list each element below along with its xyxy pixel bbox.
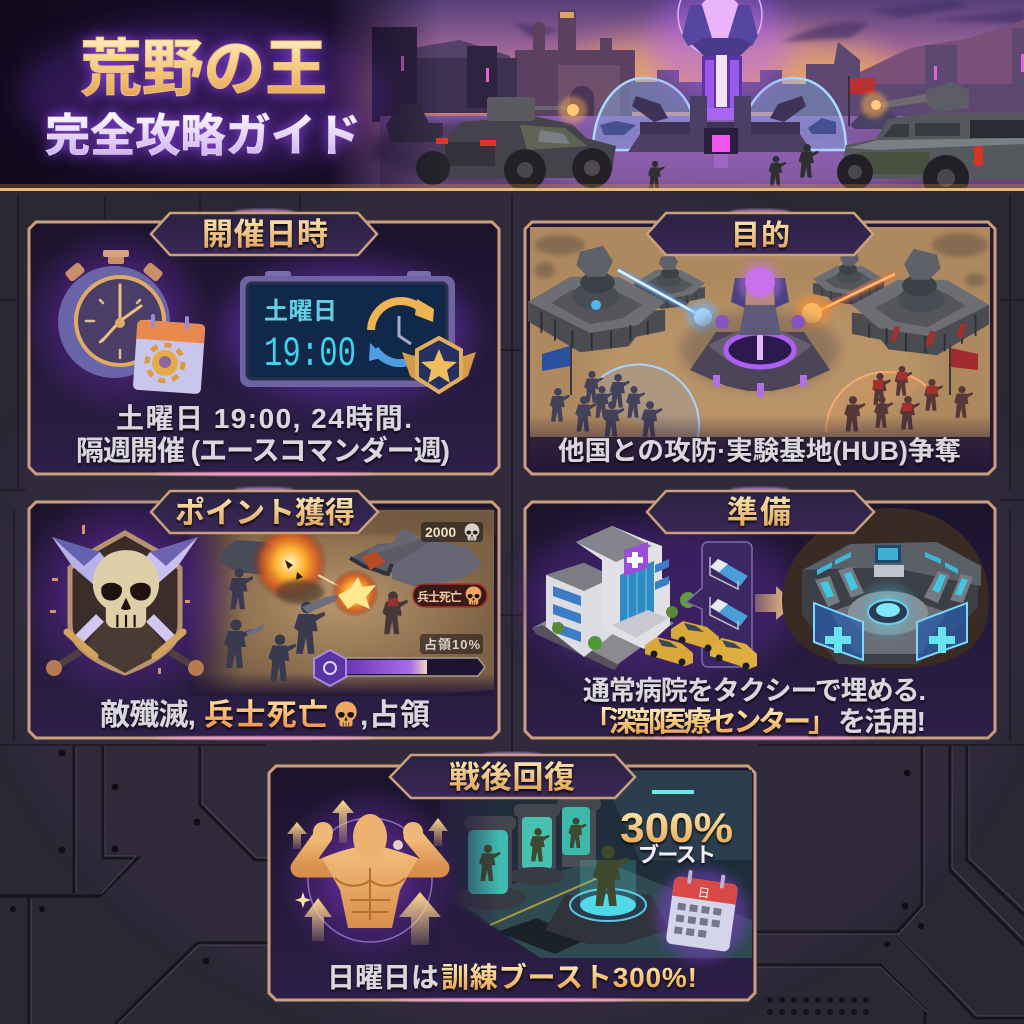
scoring text: 兵士死亡 — [204, 699, 328, 732]
panel: 開催日時 — [23, 209, 499, 476]
icon: underground medical center — [782, 508, 989, 668]
hologram platform — [545, 845, 669, 944]
recovery text: 日曜日は — [327, 962, 439, 993]
heading: 開催日時 — [151, 209, 377, 255]
icon: beds — [710, 557, 748, 629]
right vehicle — [837, 82, 1024, 188]
icon: stopwatch — [23, 225, 213, 415]
icon: hospital building — [532, 526, 696, 670]
heading: 目的 — [647, 209, 873, 255]
scoring text: ,占領 — [360, 699, 430, 732]
desert battlefield illustration — [528, 227, 990, 469]
heading: ポイント獲得: ポイント獲得 — [175, 497, 355, 530]
schedule text: 土曜日 19:00, 24時間. — [116, 403, 412, 434]
shield arcs — [586, 365, 699, 455]
panel: 準備 — [520, 487, 995, 740]
scoring text: 敵殲滅, — [100, 699, 196, 732]
icon: flexing muscle figure — [278, 785, 458, 965]
preparation text — [583, 676, 926, 737]
flags — [542, 345, 978, 395]
objective text: 他国との攻防·実験基地(HUB)争奪 — [558, 436, 961, 466]
stat chip: 2000 — [421, 522, 483, 542]
stat chip: 兵士死亡: 兵士死亡 — [417, 589, 462, 604]
heading: 開催日時: 開催日時 — [202, 217, 328, 252]
scoring text — [100, 699, 430, 732]
heading: 目的: 目的 — [731, 219, 790, 252]
stat chip: 占領10% — [420, 634, 483, 654]
heading: 準備 — [647, 487, 874, 533]
stat chip: 兵士死亡 — [413, 584, 487, 607]
300% boost label: 300% — [620, 804, 733, 851]
header banner — [0, 0, 1024, 201]
blue soldiers — [550, 371, 662, 437]
digital clock: 土曜日 — [264, 298, 337, 325]
panel: 戦後回復 — [269, 752, 755, 1002]
preparation text: を活用! — [838, 706, 926, 737]
central tower — [628, 0, 812, 168]
recovery text: 訓練ブースト300%! — [441, 961, 697, 993]
digital clock: 19:00 — [264, 330, 356, 378]
arrow: to deep medical center — [755, 586, 795, 620]
subtitle: 完全攻略ガイド — [45, 110, 361, 161]
heading: ポイント獲得 — [151, 487, 378, 533]
red soldiers — [844, 366, 973, 432]
battle scene illustration — [188, 508, 494, 698]
flag — [848, 76, 875, 126]
battle scene illustration — [330, 0, 1024, 201]
left palace and walls — [512, 10, 635, 118]
ground — [380, 116, 1024, 188]
heading: 準備: 準備 — [727, 495, 791, 530]
infantry — [648, 144, 819, 189]
digital clock — [222, 262, 472, 402]
recovery text — [327, 961, 697, 993]
icon: Sunday calendar: 日 — [697, 885, 711, 901]
heading: 戦後回復: 戦後回復 — [449, 760, 575, 795]
schedule text — [76, 403, 450, 466]
preparation text: 「深部医療センター」 — [584, 706, 836, 737]
panel: ポイント獲得 — [15, 485, 499, 740]
heading: 戦後回復 — [390, 752, 635, 798]
blue bunker — [528, 246, 719, 352]
preparation text: 通常病院をタクシーで埋める. — [583, 676, 926, 706]
stasis tubes — [454, 798, 601, 910]
training lab illustration — [447, 770, 752, 958]
icon: calendar with gear — [133, 316, 205, 394]
bed callout — [686, 542, 752, 667]
central hub tower — [680, 260, 840, 397]
icon: recurring clock arrows — [369, 299, 434, 363]
icon: skull shield with crossed swords — [15, 485, 235, 705]
progress bar — [314, 650, 485, 686]
icon: taxis — [645, 621, 757, 670]
icon: upward arrows — [287, 800, 448, 945]
left vehicle — [416, 96, 616, 191]
panel: 目的 — [525, 209, 995, 474]
schedule text: 隔週開催 (エースコマンダー週) — [76, 434, 450, 466]
red bunker — [813, 249, 989, 355]
icon: Sunday calendar — [656, 869, 748, 961]
title — [45, 35, 361, 161]
stat chip: 占領10%: 占領10% — [424, 637, 480, 652]
icon: rank badge — [402, 338, 476, 392]
shield domes — [593, 78, 693, 150]
stat chip: 2000: 2000 — [425, 524, 456, 540]
title: 荒野の王 — [80, 35, 327, 104]
far tanks — [386, 104, 443, 142]
300% boost label: ブースト — [638, 843, 716, 867]
